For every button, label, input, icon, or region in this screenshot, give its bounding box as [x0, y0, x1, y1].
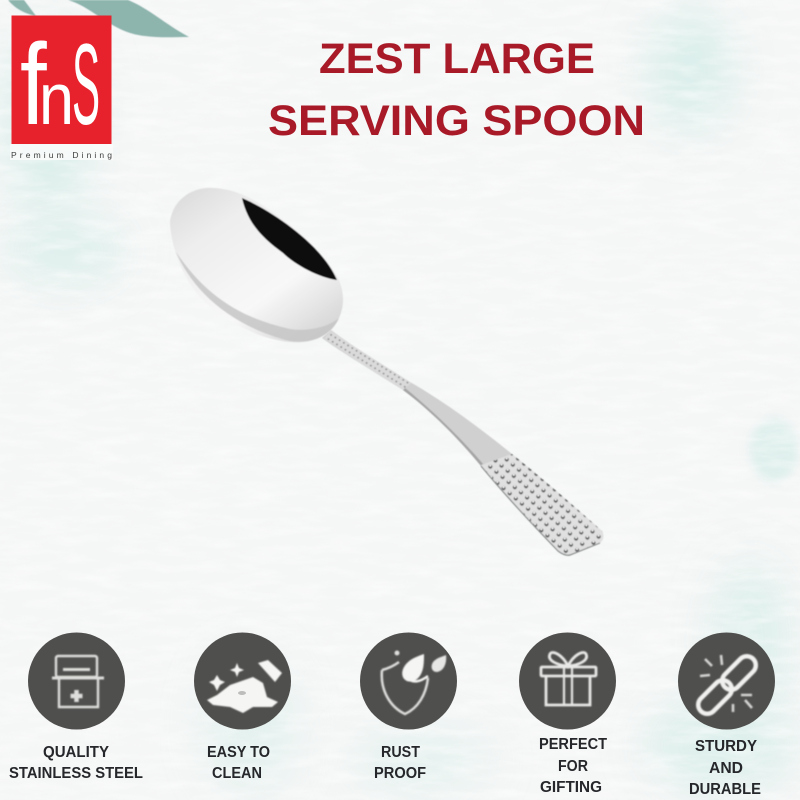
icon: shield with drops [360, 632, 457, 730]
spoon bowl [170, 188, 343, 342]
label: GIFTING [540, 779, 602, 796]
icon: toolbox [28, 632, 125, 730]
label: EASY TO [207, 744, 270, 761]
product photo: serving spoon [170, 188, 604, 555]
label: PERFECT [539, 736, 608, 753]
label: STURDY [695, 738, 757, 755]
label [689, 738, 761, 798]
feature: rust proof [360, 632, 457, 782]
feature: easy to clean [194, 632, 291, 782]
logo tagline: Premium Dining [11, 150, 112, 160]
logo letters: f [20, 21, 47, 149]
logo red square [12, 16, 112, 144]
label [374, 744, 426, 782]
label [539, 736, 608, 796]
feature: quality stainless steel [9, 632, 143, 782]
logo letters: S [72, 20, 100, 149]
title [268, 35, 645, 145]
logo letters [20, 20, 100, 149]
label: FOR [558, 758, 588, 775]
spoon handle [322, 330, 604, 555]
label: QUALITY [43, 744, 109, 761]
feature: sturdy and durable [678, 632, 775, 798]
label [9, 744, 143, 782]
logo: FnS Premium Dining [10, 16, 113, 160]
label: DURABLE [689, 781, 761, 798]
label: PROOF [374, 765, 426, 782]
icon: spill and sparkles [194, 632, 291, 730]
icon: chain links [678, 632, 775, 730]
logo letters: n [39, 59, 74, 140]
label [207, 744, 270, 782]
icon: gift box [519, 632, 616, 730]
title: SERVING SPOON [268, 97, 645, 145]
label: STAINLESS STEEL [9, 765, 143, 782]
feature: perfect for gifting [519, 632, 616, 796]
label: AND [709, 760, 743, 777]
decorative leaves [8, 0, 189, 37]
label: CLEAN [212, 765, 262, 782]
label: RUST [381, 744, 421, 761]
title: ZEST LARGE [319, 35, 595, 83]
